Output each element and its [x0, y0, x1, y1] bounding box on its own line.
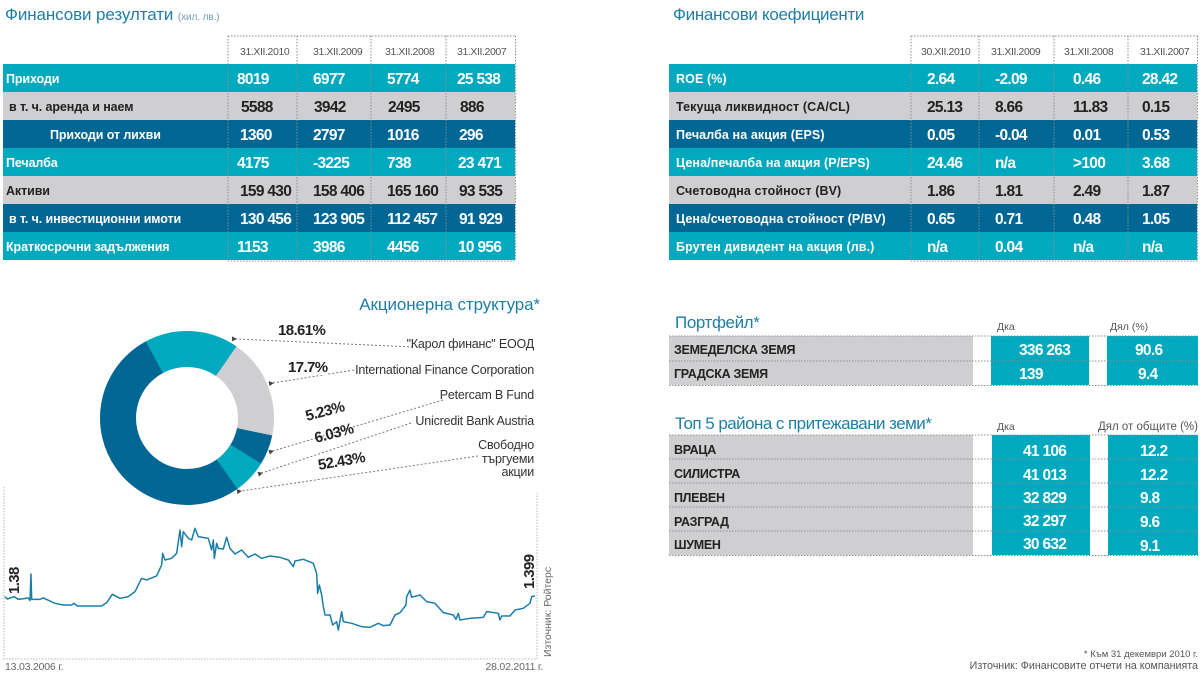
row: revenue: 8019 — [237, 71, 270, 88]
leader arrows — [236, 339, 478, 491]
row: profit: 23 471 — [458, 155, 502, 172]
row: gross dividend — [669, 232, 1197, 260]
row: current liquidity: Текуща ликвидност (CA/CL) — [676, 100, 850, 114]
row: investment properties: в т. ч. инвестиционни имоти — [9, 212, 181, 226]
header dates: 31.XII.2007 — [457, 46, 507, 58]
table: top 5 districts: 32 829 — [1023, 490, 1067, 507]
row: P/BV: 0.48 — [1073, 211, 1101, 228]
row: assets: 158 406 — [313, 183, 365, 200]
end value: 1.399 — [521, 554, 538, 589]
shareholder percentages: 6.03% — [313, 420, 355, 447]
row: rent: 886 — [460, 99, 485, 116]
row: short-term liabilities — [3, 232, 515, 260]
row: investment properties: 91 929 — [459, 211, 503, 228]
row: ROE: -2.09 — [995, 71, 1028, 88]
heading: financial results: Финансови резултати (хил. лв.) — [5, 5, 220, 24]
row: revenue: Приходи — [6, 72, 59, 86]
column headers: portfolio: Дял (%) — [1110, 321, 1148, 333]
row: profit: 738 — [387, 155, 412, 172]
row: investment properties: 123 905 — [313, 211, 365, 228]
end date: 28.02.2011 г. — [485, 661, 543, 673]
table: top 5 districts: СИЛИСТРА — [674, 467, 740, 481]
table: top 5 districts: 41 106 — [1023, 443, 1067, 460]
start value: 1.38 — [6, 567, 23, 594]
table: top 5 districts: 12.2 — [1140, 467, 1167, 484]
row: profit: 4175 — [237, 155, 270, 172]
shareholder names: акции — [501, 465, 534, 479]
row: assets: Активи — [6, 184, 50, 198]
table: portfolio: 139 — [1019, 366, 1044, 383]
row: assets — [3, 176, 515, 204]
table: portfolio: 9.4 — [1138, 366, 1159, 383]
row: short-term liabilities: Краткосрочни задължения — [6, 240, 169, 254]
row: P/EPS: Цена/печалба на акция (P/EPS) — [676, 156, 870, 170]
source: Източник: Ройтерс — [542, 567, 554, 657]
footnote and source — [970, 649, 1198, 672]
column headers: top 5: Дка — [997, 421, 1015, 433]
header dates: 31.XII.2008 — [385, 46, 435, 58]
row: interest income: 1016 — [387, 127, 420, 144]
row: profit: Печалба — [6, 156, 59, 170]
row: revenue: 6977 — [313, 71, 345, 88]
table: top 5 districts: 32 297 — [1023, 513, 1066, 530]
header dates — [921, 46, 1190, 58]
row: assets: 165 160 — [387, 183, 438, 200]
row: revenue: 5774 — [387, 71, 420, 88]
header dates: 31.XII.2009 — [991, 46, 1041, 58]
heading: financial ratios: Финансови коефициенти — [673, 5, 864, 24]
heading: portfolio: Портфейл* — [675, 313, 760, 332]
header dates: 31.XII.2008 — [1064, 46, 1114, 58]
row: ROE: 0.46 — [1073, 71, 1101, 88]
table: top 5 districts: ШУМЕН — [674, 538, 721, 552]
table: top 5 districts: 9.6 — [1140, 514, 1161, 531]
row: P/EPS: n/a — [995, 155, 1016, 172]
shareholder names: Свободно — [478, 438, 534, 452]
table: top 5 districts: 30 632 — [1023, 536, 1066, 553]
table: portfolio — [669, 336, 1198, 386]
row: P/BV: 0.65 — [927, 211, 955, 228]
row: P/EPS: 24.46 — [927, 155, 963, 172]
row: current liquidity — [669, 92, 1197, 120]
row: P/EPS — [669, 148, 1197, 176]
row: gross dividend: 0.04 — [995, 239, 1023, 256]
shareholder names: Petercam B Fund — [440, 388, 534, 402]
row: gross dividend: Брутен дивидент на акция (лв.) — [676, 240, 874, 254]
row: current liquidity: 8.66 — [995, 99, 1023, 116]
heading: shareholder structure: Акционерна структура* — [359, 295, 540, 314]
row: ROE: 28.42 — [1142, 71, 1177, 88]
table: portfolio: ЗЕМЕДЕЛСКА ЗЕМЯ — [674, 343, 795, 357]
table: top 5 districts: РАЗГРАД — [674, 515, 729, 529]
shareholder names: Unicredit Bank Austria — [415, 414, 534, 428]
table: top 5 districts: 9.1 — [1140, 538, 1161, 555]
header dates: 31.XII.2010 — [240, 46, 290, 58]
shareholder percentages: 52.43% — [317, 449, 367, 474]
row: book value: 1.87 — [1142, 183, 1169, 200]
header dates — [240, 46, 507, 58]
row: rent: 3942 — [314, 99, 346, 116]
table: portfolio: 90.6 — [1135, 342, 1163, 359]
row: ROE: ROE (%) — [676, 72, 727, 86]
row: EPS — [669, 120, 1197, 148]
row: P/BV: 1.05 — [1142, 211, 1170, 228]
row: ROE — [669, 64, 1197, 92]
row: P/EPS: >100 — [1073, 155, 1105, 172]
row: rent: 5588 — [241, 99, 274, 116]
shareholder percentages: 17.7% — [288, 359, 328, 376]
row: investment properties: 112 457 — [387, 211, 437, 228]
shareholder percentages — [278, 322, 367, 474]
header dates: 31.XII.2007 — [1140, 46, 1190, 58]
row: investment properties — [3, 204, 515, 232]
row: gross dividend: n/a — [927, 239, 948, 256]
row: ROE: 2.64 — [927, 71, 955, 88]
shareholder percentages: 5.23% — [304, 398, 346, 425]
table: top 5 districts — [669, 435, 1198, 556]
row: current liquidity: 0.15 — [1142, 99, 1170, 116]
row: rent: в т. ч. аренда и наем — [9, 100, 133, 114]
row: assets: 159 430 — [240, 183, 291, 200]
table: top 5 districts: ПЛЕВЕН — [674, 491, 725, 505]
table: portfolio: ГРАДСКА ЗЕМЯ — [674, 367, 768, 381]
row: revenue — [3, 64, 515, 92]
footnote and source: * Към 31 декември 2010 г. — [1084, 649, 1198, 660]
row: P/EPS: 3.68 — [1142, 155, 1170, 172]
row: book value: Счетоводна стойност (BV) — [676, 184, 841, 198]
footnote and source: Източник: Финансовите отчети на компанията — [970, 660, 1198, 672]
row: interest income — [3, 120, 515, 148]
row: short-term liabilities: 10 956 — [458, 239, 502, 256]
row: current liquidity: 11.83 — [1073, 99, 1109, 116]
shareholder names: "Карол финанс" ЕООД — [407, 337, 535, 351]
row: book value: 2.49 — [1073, 183, 1101, 200]
row: interest income: Приходи от лихви — [50, 128, 161, 142]
row: book value — [669, 176, 1197, 204]
row: EPS: -0.04 — [995, 127, 1028, 144]
shareholder names — [355, 337, 535, 479]
header dates: 30.XII.2010 — [921, 46, 971, 58]
table: financial ratios — [669, 36, 1198, 261]
row: gross dividend: n/a — [1073, 239, 1094, 256]
row: rent — [3, 92, 515, 120]
table: top 5 districts: ВРАЦА — [674, 443, 716, 457]
shareholder names: International Finance Corporation — [355, 363, 534, 377]
row: interest income: 2797 — [313, 127, 345, 144]
row: short-term liabilities: 4456 — [387, 239, 420, 256]
row: EPS: Печалба на акция (EPS) — [676, 128, 825, 142]
column headers: top 5: Дял от общите (%) — [1098, 421, 1198, 433]
row: P/BV: 0.71 — [995, 211, 1023, 228]
row: interest income: 296 — [459, 127, 484, 144]
row: book value: 1.86 — [927, 183, 955, 200]
table: top 5 districts: 12.2 — [1140, 443, 1167, 460]
donut chart: shareholder structure — [91, 322, 283, 514]
column headers: portfolio: Дка — [997, 321, 1015, 333]
row: assets: 93 535 — [459, 183, 503, 200]
row: interest income: 1360 — [240, 127, 272, 144]
start date: 13.03.2006 г. — [5, 661, 63, 673]
line chart: share price — [4, 487, 554, 673]
row: rent: 2495 — [388, 99, 421, 116]
shareholder percentages: 18.61% — [278, 322, 326, 339]
row: book value: 1.81 — [995, 183, 1023, 200]
row: revenue: 25 538 — [457, 71, 501, 88]
shareholder names: търгуеми — [482, 452, 534, 466]
table: top 5 districts: 9.8 — [1140, 490, 1161, 507]
table: top 5 districts: 41 013 — [1023, 467, 1067, 484]
table: financial results — [3, 36, 516, 261]
column headers: portfolio — [997, 321, 1148, 333]
row: investment properties: 130 456 — [240, 211, 292, 228]
row: current liquidity: 25.13 — [927, 99, 963, 116]
row: P/BV — [669, 204, 1197, 232]
row: short-term liabilities: 1153 — [237, 239, 269, 256]
row: EPS: 0.53 — [1142, 127, 1170, 144]
row: EPS: 0.05 — [927, 127, 955, 144]
row: profit: -3225 — [313, 155, 350, 172]
row: gross dividend: n/a — [1142, 239, 1163, 256]
row: EPS: 0.01 — [1073, 127, 1101, 144]
heading: top 5 districts: Топ 5 района с притежавани земи* — [675, 414, 932, 433]
table: portfolio: 336 263 — [1019, 342, 1071, 359]
row: short-term liabilities: 3986 — [313, 239, 346, 256]
header dates: 31.XII.2009 — [313, 46, 363, 58]
row: P/BV: Цена/счетоводна стойност (P/BV) — [676, 212, 886, 226]
column headers: top 5 — [997, 421, 1198, 433]
row: profit — [3, 148, 515, 176]
